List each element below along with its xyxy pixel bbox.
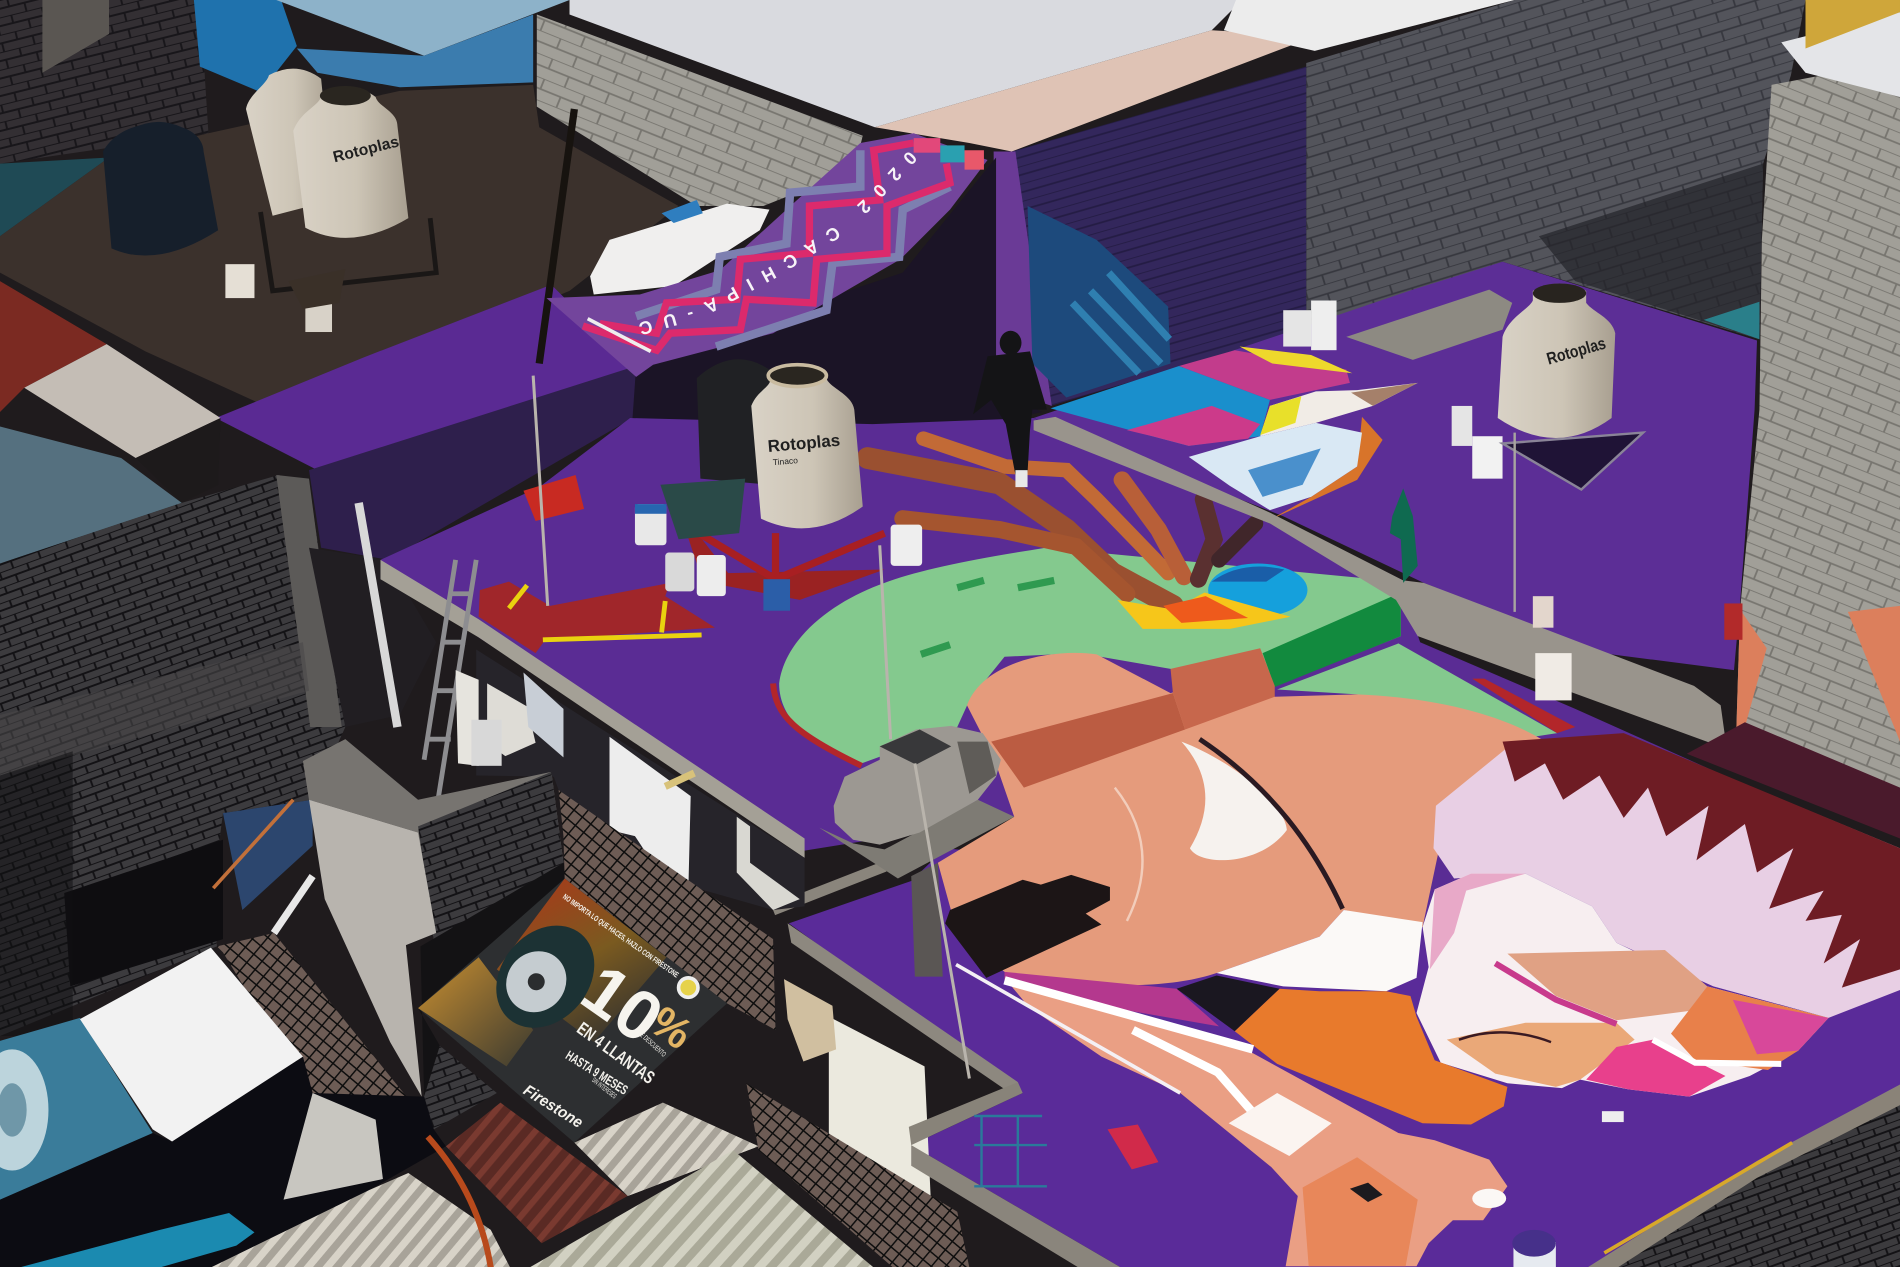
white propane tank — [590, 200, 769, 294]
fire and blue circle mural — [1117, 563, 1307, 629]
tree branches mural — [868, 439, 1255, 606]
main purple roof upper part — [380, 418, 1900, 945]
tire advert banner on tarp — [0, 948, 303, 1200]
salmon parapet segment — [1171, 648, 1275, 729]
green mural area — [773, 548, 1557, 766]
rotoplas centre tank: Tinaco — [772, 455, 799, 467]
black tank — [697, 359, 769, 485]
white highlight on skin — [1181, 742, 1287, 860]
right concrete tower — [1687, 0, 1900, 839]
main purple roof lower part — [789, 848, 1900, 1267]
red stand — [679, 497, 885, 584]
dark purple wall under upper left roof — [309, 366, 636, 560]
rotoplas tank left — [246, 69, 333, 216]
face — [1417, 874, 1829, 1097]
ledge beneath platform — [773, 866, 885, 910]
rotoplas centre tank: Rotoplas — [767, 431, 841, 456]
central water tanks group — [523, 359, 885, 584]
lower right brick corner — [1587, 1085, 1900, 1267]
rooftop sheets on upper right roof — [1346, 290, 1512, 360]
hair — [1433, 733, 1900, 1018]
red paint under stand — [679, 509, 885, 600]
right rotoplas tank — [1498, 284, 1643, 490]
dark pole — [539, 109, 574, 364]
white tarp — [80, 948, 303, 1141]
lower wall band — [911, 1145, 1121, 1267]
parked tanks top left — [103, 69, 436, 291]
brand name: Firestone — [520, 1082, 586, 1132]
rotoplas centre tank — [751, 365, 863, 528]
green hanging cloth — [1390, 488, 1418, 583]
magenta sleeve — [1005, 972, 1219, 1026]
red paint patch — [479, 582, 715, 653]
white wall lower building — [829, 1017, 931, 1196]
percent sign: % — [641, 998, 701, 1059]
orange shirt — [1235, 989, 1507, 1124]
left brick building — [0, 475, 436, 1036]
dark water tank — [103, 122, 218, 256]
salmon skin of the figure — [938, 653, 1541, 985]
balcony railing — [559, 790, 776, 1030]
rotoplas tank right: Rotoplas — [331, 133, 401, 166]
red crate — [523, 475, 584, 521]
discount figure: 10 — [568, 948, 678, 1058]
yellow roller — [665, 773, 694, 786]
rotoplas tank right — [293, 86, 408, 238]
banner lettering: 0202 CACHIPA-UC — [639, 152, 916, 334]
bird mural — [1051, 347, 1418, 520]
terracotta raised parapet — [991, 693, 1185, 788]
white wall and pale roof top — [570, 0, 1515, 151]
upper left purple roof — [216, 285, 636, 470]
dark gap and brick beside advert — [418, 863, 570, 1129]
dark crease line — [1200, 739, 1343, 909]
stairs and railing — [217, 933, 414, 1133]
right rotoplas tank: Rotoplas — [1544, 334, 1608, 369]
stand and shadow — [1503, 433, 1643, 490]
painted purple wall with wing mural — [994, 67, 1306, 406]
hanging bag and cloth — [284, 1093, 383, 1200]
blue car — [19, 1213, 254, 1267]
blue painted wall and pipes — [213, 800, 313, 933]
yellow paint marks — [509, 585, 702, 640]
white collar — [1217, 910, 1423, 991]
building facade under roof edge — [456, 649, 805, 910]
dark lower alley — [0, 1057, 446, 1267]
support stand — [261, 212, 436, 291]
discount caption: DE DESCUENTO — [636, 1028, 668, 1059]
front roof edge — [380, 560, 805, 858]
blue rack — [974, 1116, 1047, 1186]
firestone advert banner — [418, 879, 727, 1143]
person walking — [973, 331, 1047, 487]
dark shade beneath banner — [630, 158, 1042, 448]
lower front parapet — [909, 1082, 1023, 1145]
bottom roofs — [211, 1103, 874, 1267]
white laundry — [610, 737, 691, 893]
arm and hand — [956, 965, 1507, 1266]
wing mural — [1028, 206, 1171, 397]
hanging banner — [546, 133, 988, 377]
store logo — [679, 978, 698, 997]
small white object on roof — [1602, 1111, 1624, 1122]
white pole — [359, 503, 397, 727]
ladder — [424, 560, 476, 803]
interest line: SIN INTERESES — [590, 1075, 619, 1100]
red paper on roof — [1108, 1124, 1158, 1169]
central parapet ledge — [1034, 417, 1727, 749]
top-left neighbouring buildings — [0, 0, 570, 236]
teal strip behind roof — [1704, 302, 1759, 339]
red strip at wall base — [1472, 679, 1575, 733]
bottom railing — [746, 1083, 969, 1267]
upper right purple roof — [1034, 262, 1757, 670]
lower roof front ledge — [788, 923, 1018, 1097]
flowers on banner corner — [914, 138, 984, 170]
cinder block wall — [537, 15, 863, 206]
faint chalk curve — [1115, 788, 1142, 921]
slogan: NO IMPORTA LO QUE HACES, HAZLO CON FIRESTONE — [561, 892, 680, 979]
stone tank on platform — [819, 726, 1014, 977]
dark neckline — [1177, 975, 1280, 1031]
equipment — [660, 479, 745, 539]
scattered antenna poles — [533, 376, 969, 1078]
cast shadow on skin — [945, 875, 1110, 978]
tire — [476, 906, 615, 1047]
paint buckets — [635, 301, 1572, 1267]
thin pole on right roof — [1514, 433, 1516, 612]
small concrete building — [303, 739, 563, 1097]
left corrugated roofs — [0, 281, 221, 563]
small planter and bucket — [225, 264, 345, 332]
concrete rooftop upper-left — [0, 85, 679, 412]
grey block wall right — [1306, 0, 1805, 342]
rust water heater — [784, 979, 836, 1061]
nine months line: HASTA 9 MESES — [563, 1048, 631, 1098]
four tires line: EN 4 LLANTAS — [573, 1018, 659, 1088]
